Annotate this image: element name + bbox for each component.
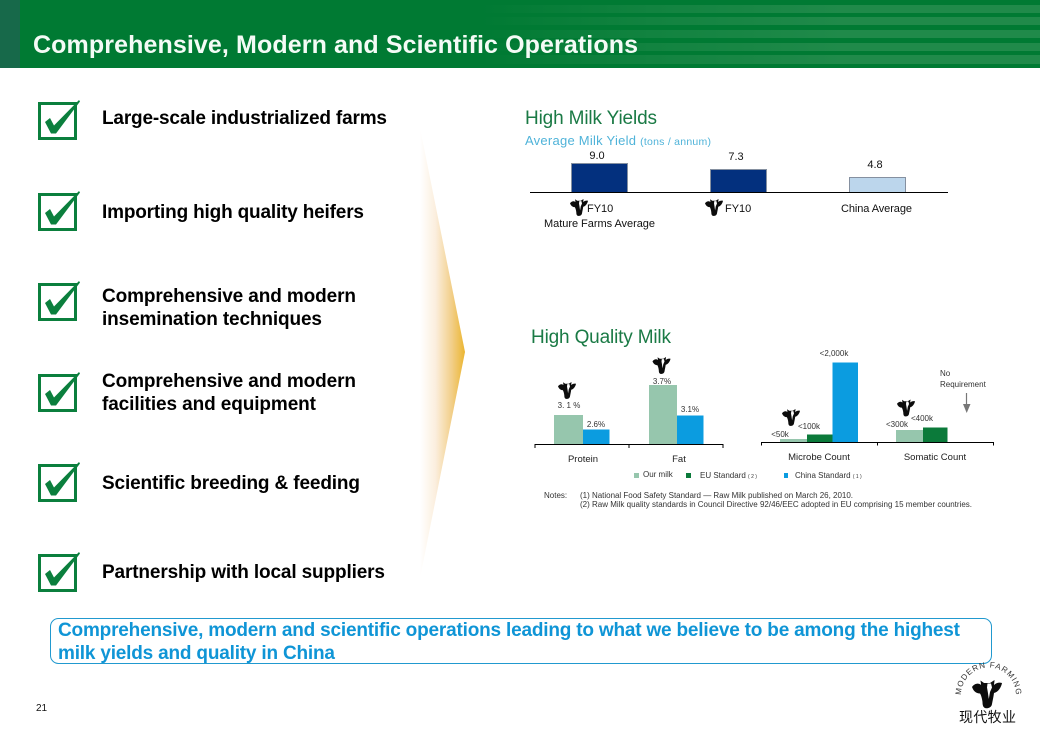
- bar chart: microbe and somatic count: <300k: [886, 420, 909, 429]
- bar chart: milk yield: [530, 150, 948, 230]
- item: heifers: [40, 191, 364, 230]
- bar chart: milk yield: 4.8: [867, 159, 883, 171]
- callout: no requirement: No: [940, 369, 951, 378]
- callout: conclusion: Comprehensive, modern and scientific operations leading to what we believe to be among the highest: [58, 620, 961, 641]
- bar chart: microbe and somatic count: <2,000k: [820, 349, 849, 358]
- item: heifers: Importing high quality heifers: [102, 202, 364, 223]
- logo: modern farming: [955, 662, 1022, 727]
- bar chart: milk yield: FY10: [587, 203, 613, 215]
- bar chart: microbe and somatic count: <100k: [798, 422, 821, 431]
- bar chart: milk yield: Mature Farms Average: [544, 218, 655, 230]
- bar chart: milk yield: China Average: [841, 203, 912, 215]
- bar chart: microbe and somatic count: Microbe Count: [788, 452, 850, 463]
- item: insemination: Comprehensive and modern: [102, 286, 356, 307]
- item: facilities: facilities and equipment: [102, 394, 317, 415]
- bar chart: microbe and somatic count: [762, 349, 994, 463]
- bar chart: protein and fat: Fat: [672, 454, 686, 465]
- bar chart: protein and fat: Protein: [568, 454, 598, 465]
- title: Comprehensive, Modern and Scientific Operations: [33, 31, 638, 59]
- subheading: average milk yield: Average Milk Yield (tons / annum): [525, 133, 711, 148]
- item: insemination: insemination techniques: [102, 309, 322, 330]
- legend: Our milk: [643, 470, 674, 479]
- bar chart: microbe and somatic count: <50k: [771, 430, 790, 439]
- legend: China Standard ( 1 ): [795, 471, 862, 480]
- item: suppliers: Partnership with local suppliers: [102, 562, 385, 583]
- bar chart: milk yield: 7.3: [728, 151, 744, 163]
- legend: [634, 470, 862, 480]
- item: facilities: Comprehensive and modern: [102, 371, 356, 392]
- arrow: chevron pointing to charts: [420, 128, 465, 578]
- notes: (2) Raw Milk quality standards in Council Directive 92/46/EEC adopted in EU comprising 15 member countries.: [580, 500, 972, 509]
- bar chart: protein and fat: 3. 1 %: [558, 401, 580, 410]
- callout: conclusion: [50, 618, 992, 664]
- page number: 21: [36, 703, 48, 714]
- callout: no requirement: Requirement: [940, 380, 987, 389]
- item: large-scale farms: Large-scale industrialized farms: [102, 108, 387, 129]
- notes: (1) National Food Safety Standard — Raw Milk published on March 26, 2010.: [580, 491, 853, 500]
- logo: modern farming: 现代牧业: [959, 707, 1016, 727]
- panel: high milk yields: [525, 108, 948, 230]
- callout: conclusion: milk yields and quality in China: [58, 643, 335, 664]
- panel: high quality milk: [531, 327, 994, 509]
- item: breeding: [40, 462, 360, 500]
- legend: EU Standard ( 2 ): [700, 471, 757, 480]
- bar chart: milk yield: FY10: [725, 203, 751, 215]
- bar chart: milk yield: 9.0: [589, 150, 605, 162]
- bar chart: protein and fat: 2.6%: [587, 420, 605, 429]
- notes: [544, 491, 972, 509]
- header banner: [0, 0, 1040, 68]
- bar chart: microbe and somatic count: <400k: [911, 414, 934, 423]
- item: facilities: [40, 371, 356, 415]
- item: suppliers: [40, 552, 385, 590]
- bar chart: protein and fat: 3.7%: [653, 377, 671, 386]
- checklist: operations: [40, 100, 387, 590]
- bar chart: protein and fat: [535, 357, 723, 465]
- heading: high milk yields: High Milk Yields: [525, 108, 657, 129]
- bar chart: protein and fat: 3.1%: [681, 405, 699, 414]
- item: breeding: Scientific breeding & feeding: [102, 473, 360, 494]
- heading: high quality milk: High Quality Milk: [531, 327, 672, 348]
- bar chart: microbe and somatic count: Somatic Count: [904, 452, 967, 463]
- item: large-scale farms: [40, 100, 387, 138]
- notes: Notes:: [544, 491, 567, 500]
- logo: modern farming: MODERN FARMING: [955, 662, 1022, 694]
- item: insemination: [40, 281, 356, 330]
- callout: no requirement: [940, 369, 987, 413]
